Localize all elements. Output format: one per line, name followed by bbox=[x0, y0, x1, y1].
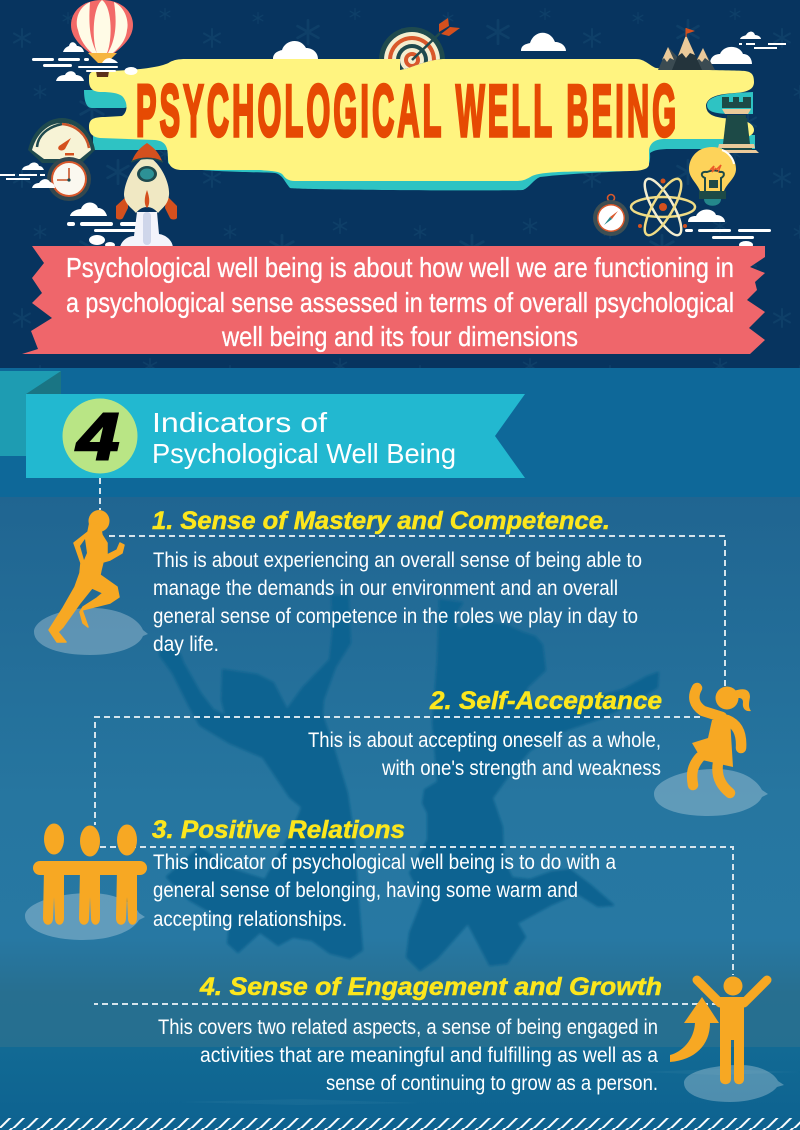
indicator 4: person with growth arrow bbox=[670, 976, 784, 1102]
section heading bbox=[152, 407, 456, 469]
pedestal bbox=[34, 608, 148, 655]
indicator 2: dancing girl bbox=[654, 686, 768, 816]
indicator 1 text bbox=[152, 507, 642, 656]
dashed connectors bbox=[94, 478, 733, 1004]
icon: rocket with smoke bbox=[67, 143, 177, 248]
bottom hatch stripe bbox=[0, 1118, 800, 1130]
indicator 4 text: sense of continuing to grow as a person. bbox=[326, 1072, 658, 1095]
ribbon yellow front bbox=[89, 59, 754, 181]
indicator 3 text bbox=[152, 816, 616, 931]
ribbon body bbox=[26, 394, 525, 478]
icon: hot air balloon bbox=[71, 0, 133, 77]
indicator 3 text: This indicator of psychological well being is to do with a bbox=[153, 851, 616, 874]
indicator 1 text: general sense of competence in the roles we play in day to bbox=[153, 605, 638, 628]
background: lower panel with sea bbox=[0, 497, 800, 1130]
pedestal bbox=[654, 769, 768, 816]
pedestal bbox=[684, 1065, 784, 1102]
indicator 2 text: with one's strength and weakness bbox=[381, 757, 661, 780]
indicator 3: three people bbox=[25, 824, 147, 940]
clouds and speed lines: lower right bbox=[685, 210, 771, 249]
silhouette: right jumping person bbox=[407, 600, 658, 970]
indicator 2 text: 2. Self-Acceptance bbox=[429, 687, 662, 715]
icon: mountains with flag bbox=[658, 28, 715, 70]
icon: compass bbox=[593, 194, 629, 236]
clouds and speed lines: left bbox=[0, 162, 55, 188]
indicator 3 text: 3. Positive Relations bbox=[152, 816, 405, 844]
ribbon teal back bbox=[84, 90, 755, 190]
indicator 3 text: accepting relationships. bbox=[153, 908, 347, 931]
icon: light bulb bbox=[689, 147, 736, 206]
indicator 4 text: 4. Sense of Engagement and Growth bbox=[199, 973, 662, 1001]
indicator 4 text: This covers two related aspects, a sense of being engaged in bbox=[158, 1016, 658, 1039]
icon: chess tower bbox=[714, 97, 759, 153]
background: blue band bbox=[0, 368, 800, 497]
icon: growth arrow bbox=[670, 997, 719, 1062]
icon: girl bbox=[692, 686, 751, 793]
indicator 1 text: 1. Sense of Mastery and Competence. bbox=[152, 507, 610, 535]
silhouette: left jumping person bbox=[160, 596, 362, 958]
banner text: well being and its four dimensions bbox=[221, 321, 578, 352]
title text: PSYCHOLOGICAL WELL BEING bbox=[136, 70, 676, 152]
number badge bbox=[62, 398, 138, 474]
icon: target with arrow bbox=[379, 18, 460, 70]
banner text bbox=[66, 252, 734, 352]
background: navy header with snowflakes bbox=[0, 0, 800, 368]
pedestal bbox=[25, 893, 145, 940]
indicator 1 text: day life. bbox=[153, 633, 219, 656]
icon: trio bbox=[33, 824, 147, 925]
icon: runner bbox=[49, 510, 124, 642]
indicator 1 text: This is about experiencing an overall sense of being able to bbox=[153, 549, 642, 572]
icon: person bbox=[697, 976, 767, 1084]
banner shape bbox=[22, 246, 765, 354]
clouds: top centre and right bbox=[273, 32, 786, 64]
section heading: Indicators of bbox=[152, 407, 327, 438]
indicator 3 text: general sense of belonging, having some warm and bbox=[153, 879, 578, 902]
section header ribbon bbox=[0, 371, 525, 478]
indicator 1: figure running bbox=[34, 510, 148, 655]
indicator 2 text: This is about accepting oneself as a whole, bbox=[308, 729, 661, 752]
ribbon teal loop bbox=[707, 92, 753, 114]
indicator 1 text: manage the demands in our environment and an overall bbox=[153, 577, 618, 600]
icon: clock bbox=[47, 157, 91, 201]
indicator 2 text bbox=[308, 687, 662, 780]
title ribbon bbox=[84, 59, 755, 190]
ribbon fold bbox=[0, 371, 61, 456]
indicator 4 text bbox=[158, 973, 662, 1095]
indicator 4 text: activities that are meaningful and fulfilling as well as a bbox=[200, 1044, 658, 1067]
section heading: Psychological Well Being bbox=[152, 438, 456, 469]
number badge: 4 bbox=[75, 399, 119, 473]
clouds and speed lines: top left bbox=[32, 42, 138, 81]
icon: speedometer bbox=[28, 118, 95, 163]
intro ribbon banner bbox=[22, 246, 765, 354]
icon: atom bbox=[631, 174, 695, 240]
